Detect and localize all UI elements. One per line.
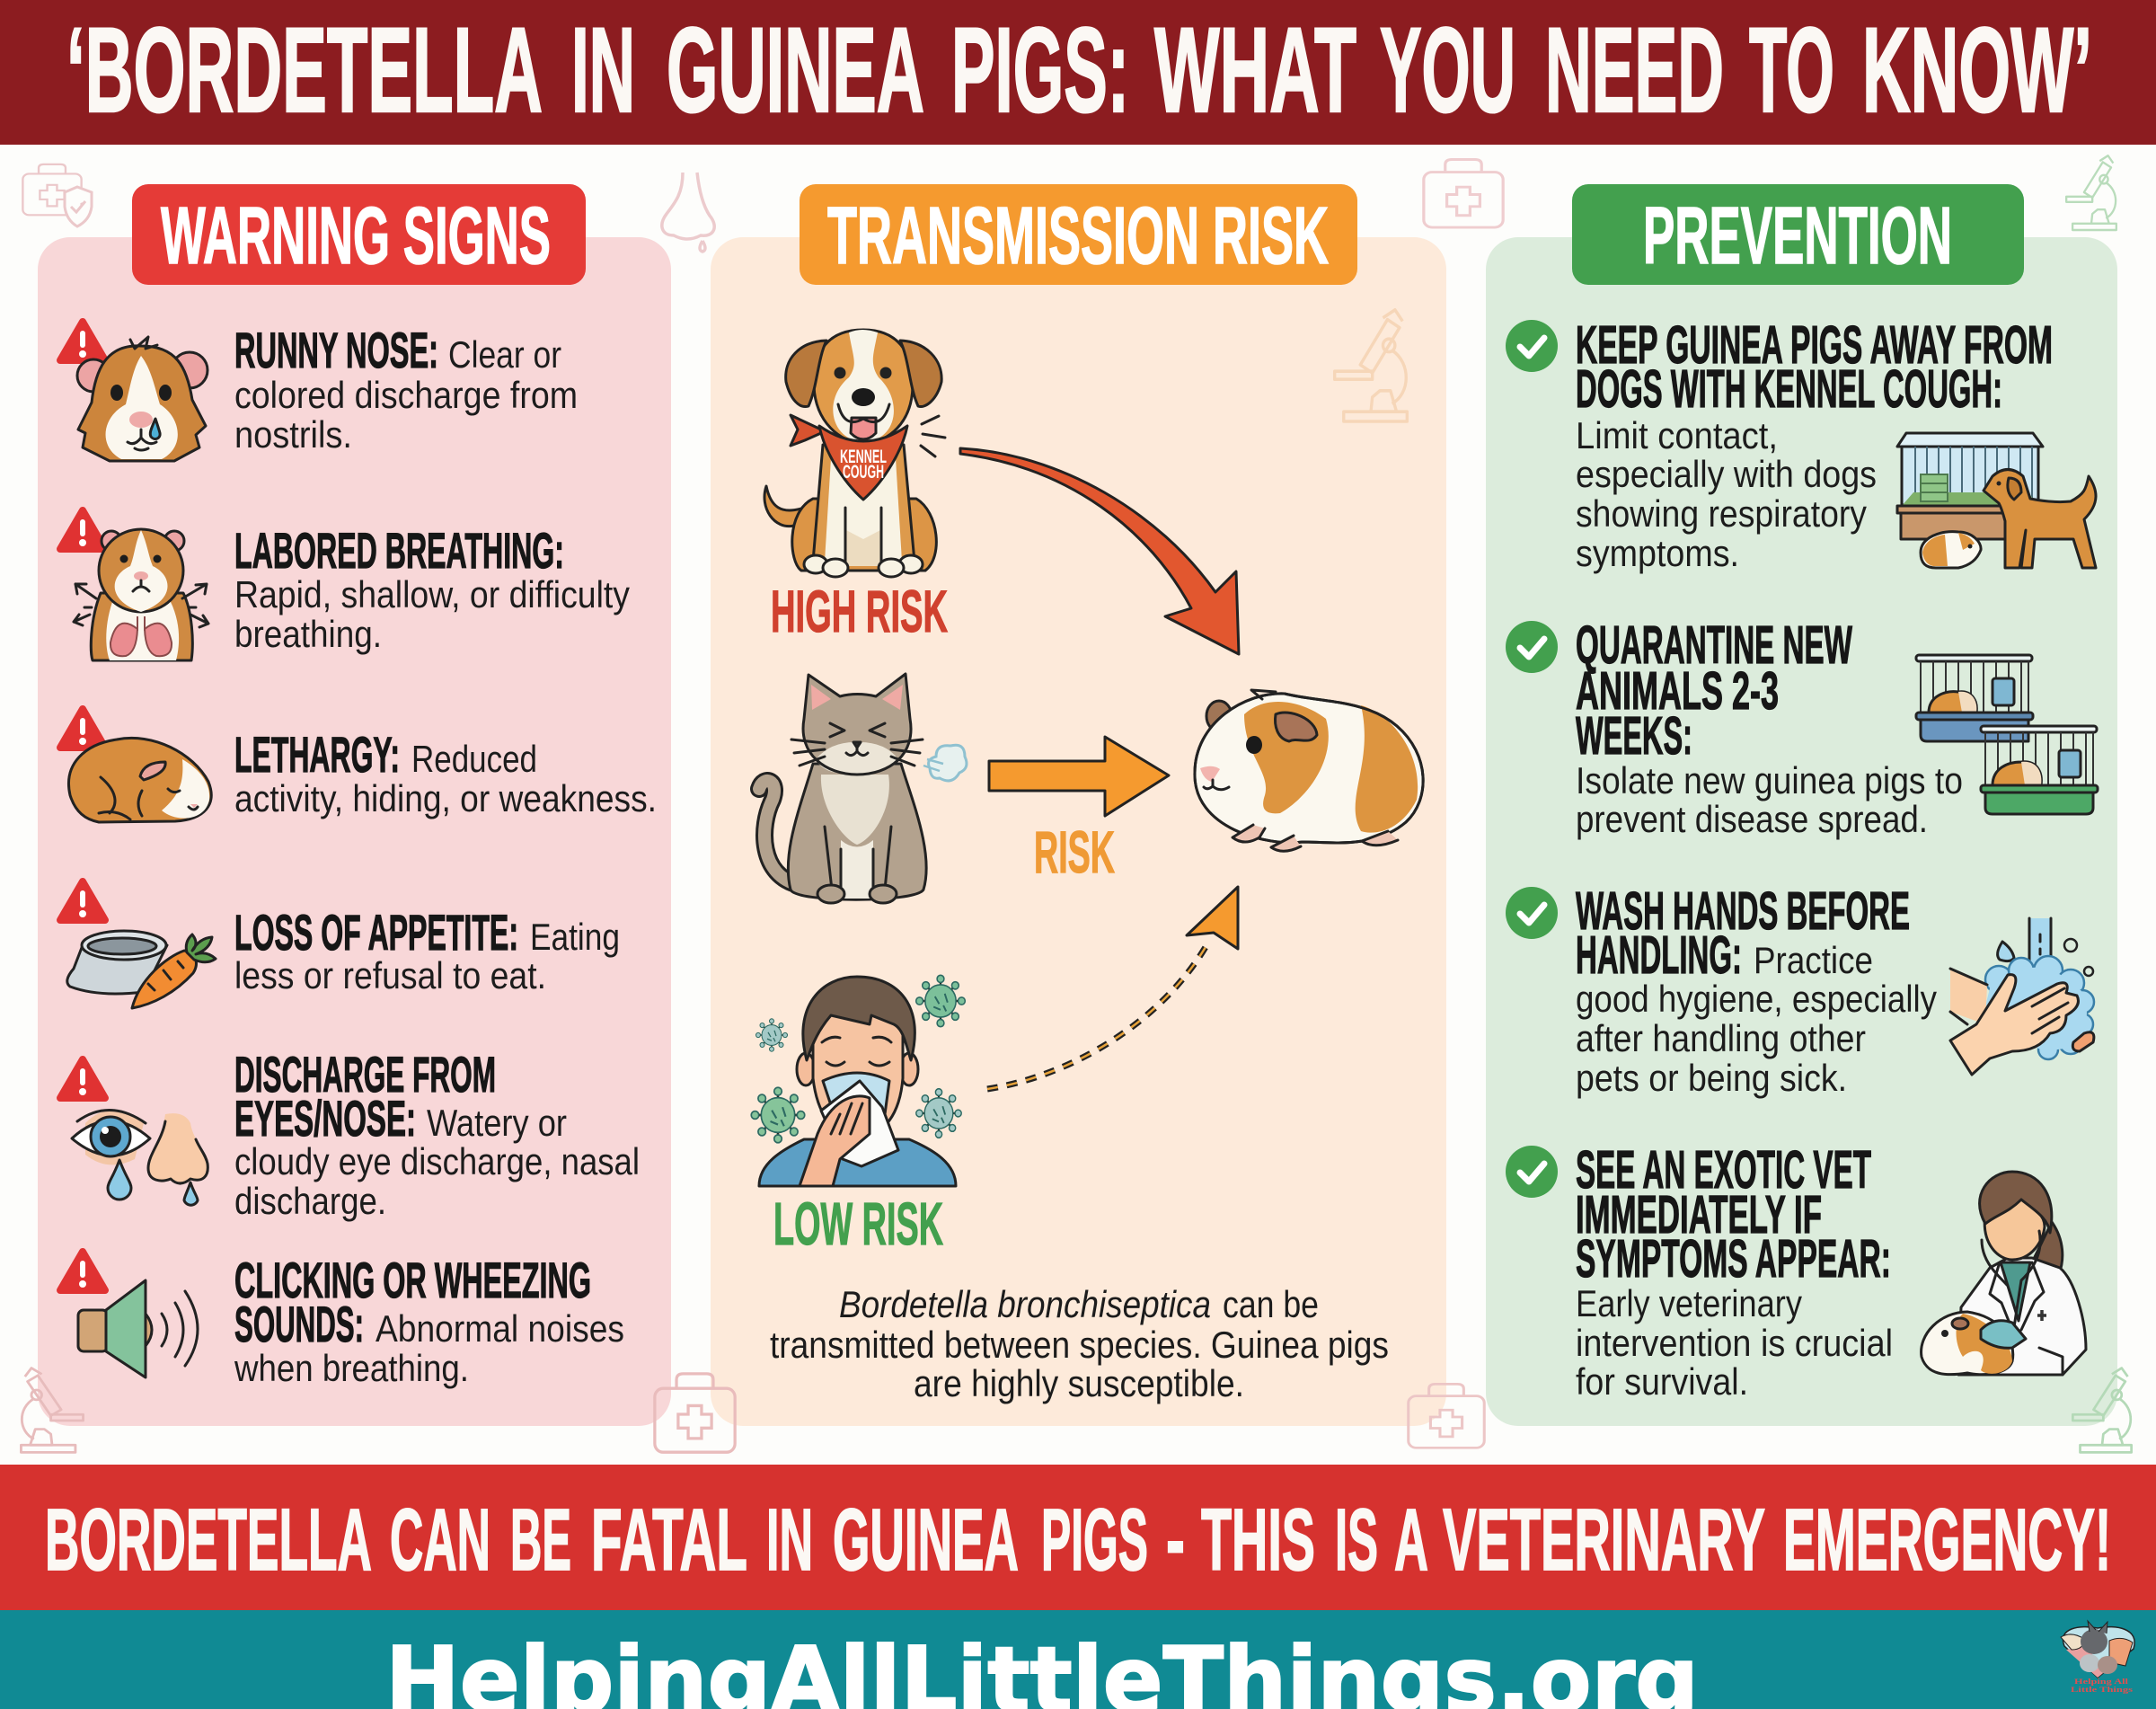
check icon 2 <box>1506 621 1558 673</box>
decorative icon: microscope on transmission panel <box>1335 310 1407 421</box>
label: discharge from eyes and nose: EYES/NOSE: <box>234 1090 416 1147</box>
text: quarantine new animals <box>1576 615 1963 840</box>
panel: prevention background <box>1486 237 2117 1426</box>
heading: transmission risk <box>800 184 1357 285</box>
title banner: IN <box>571 4 635 137</box>
decorative icon: first aid kit top <box>1424 159 1503 227</box>
label: lethargy <box>234 726 657 819</box>
label: loss of appetite <box>234 904 620 996</box>
icon: eye and nose with drops <box>72 1110 208 1205</box>
text: keep guinea pigs away: Limit contact, <box>1576 414 1778 456</box>
text: bordetella note: transmitted between species. Guinea pigs <box>770 1324 1389 1366</box>
title banner: YOU <box>1380 4 1515 137</box>
heading: warning signs: WARNING SIGNS <box>161 191 551 281</box>
text: see an exotic vet: SEE AN EXOTIC VET <box>1576 1140 1871 1200</box>
text: kennel cough bandana <box>840 447 887 483</box>
icon: guinea pig with lungs <box>74 529 208 660</box>
text: wash hands: Practice <box>1754 939 1873 981</box>
heading: warning signs <box>132 184 586 285</box>
emergency banner <box>0 1465 2156 1610</box>
panel: transmission risk background <box>711 237 1446 1426</box>
label: high risk: HIGH RISK <box>771 578 948 644</box>
label: clicking or wheezing sounds <box>234 1252 624 1389</box>
text: wash hands: after handling other <box>1576 1017 1866 1059</box>
label: runny nose: nostrils. <box>234 413 352 456</box>
heading: transmission risk: TRANSMISSION RISK <box>827 191 1329 281</box>
check icon 4 <box>1506 1146 1558 1198</box>
text: quarantine new animals: ANIMALS 2-3 <box>1576 661 1779 721</box>
illustration: washing hands <box>1950 918 2094 1075</box>
footer bar with website <box>0 1610 2156 1709</box>
text: wash hands <box>1576 881 1937 1099</box>
warning icon 4 <box>60 881 105 920</box>
text: kennel cough bandana: COUGH <box>843 462 884 483</box>
label: clicking or wheezing sounds: CLICKING OR WHEEZING <box>234 1252 591 1308</box>
label: loss of appetite: Eating <box>530 916 620 958</box>
label: labored breathing: LABORED BREATHING: <box>234 522 564 579</box>
text: keep guinea pigs away: showing respiratory <box>1576 492 1867 535</box>
text: keep guinea pigs away <box>1576 315 2053 574</box>
logo: helping all little things <box>2061 1621 2134 1694</box>
label: discharge from eyes and nose: Watery or <box>427 1102 567 1144</box>
warning icon 6 <box>60 1252 105 1290</box>
text: wash hands: HANDLING: <box>1576 925 1742 985</box>
panel: prevention <box>1506 184 2098 1403</box>
emergency banner: CAN <box>390 1491 490 1589</box>
icon: guinea pig face with runny nose <box>77 337 208 461</box>
label: clicking or wheezing sounds: Abnormal noises <box>376 1307 624 1350</box>
emergency banner: A <box>1394 1491 1428 1589</box>
text: see an exotic vet <box>1576 1140 1893 1403</box>
label: runny nose: colored discharge from <box>234 374 578 416</box>
title banner: WHAT <box>1154 4 1356 137</box>
illustration: dog with kennel cough <box>764 330 945 577</box>
decorative icon: microscope bottom right <box>2072 1368 2132 1452</box>
warning icon 5 <box>60 1059 105 1098</box>
label: lethargy: LETHARGY: <box>234 726 400 783</box>
label: discharge from eyes and nose: discharge. <box>234 1180 386 1222</box>
label: labored breathing: Rapid, shallow, or difficulty <box>234 573 630 615</box>
label: runny nose: RUNNY NOSE: <box>234 322 438 378</box>
text: keep guinea pigs away: especially with dogs <box>1576 453 1877 495</box>
text: see an exotic vet: Early veterinary <box>1576 1282 1802 1324</box>
text: quarantine new animals: prevent disease spread. <box>1576 798 1928 840</box>
arrow: risk <box>989 737 1169 816</box>
icon: speaker with sound waves <box>78 1280 198 1377</box>
decorative icon: nose <box>662 173 714 252</box>
label: lethargy: activity, hiding, or weakness. <box>234 777 657 819</box>
label: clicking or wheezing sounds: SOUNDS: <box>234 1296 364 1352</box>
label: runny nose: Clear or <box>448 333 561 376</box>
text: quarantine new animals: QUARANTINE NEW <box>1576 615 1852 675</box>
label: labored breathing: breathing. <box>234 613 382 655</box>
emergency banner: BE <box>510 1491 571 1589</box>
illustration: sick person with mask and tissue <box>751 975 965 1186</box>
illustration: cage, guinea pig and dog <box>1897 433 2096 568</box>
label: labored breathing <box>234 522 630 655</box>
label: risk: RISK <box>1034 819 1115 885</box>
illustration: vet holding guinea pig <box>1922 1172 2086 1375</box>
label: loss of appetite: LOSS OF APPETITE: <box>234 904 518 961</box>
warning icon 2 <box>60 510 105 549</box>
check icon 3 <box>1506 887 1558 939</box>
arrow: low risk dashed <box>987 887 1238 1089</box>
label: discharge from eyes and nose <box>234 1046 640 1222</box>
text: bordetella note: can be <box>1223 1283 1319 1325</box>
check icon 1 <box>1506 320 1558 372</box>
text: bordetella note <box>770 1283 1389 1404</box>
warning icon 1 <box>60 322 105 360</box>
text: keep guinea pigs away: symptoms. <box>1576 532 1739 574</box>
title banner: TO <box>1749 4 1834 137</box>
emergency banner: IN <box>766 1491 813 1589</box>
text: see an exotic vet: intervention is crucial <box>1576 1322 1893 1364</box>
decorative icon: first aid kit bottom right <box>1409 1384 1484 1448</box>
panel: transmission risk <box>751 184 1423 1404</box>
label: discharge from eyes and nose: DISCHARGE FROM <box>234 1046 496 1102</box>
text: wash hands: good hygiene, especially <box>1576 978 1937 1020</box>
title banner: GUINEA <box>667 4 924 137</box>
title banner: PIGS: <box>951 4 1129 137</box>
emergency banner: THIS <box>1201 1491 1315 1589</box>
logo: helping all little things: Helping All <box>2074 1678 2129 1686</box>
label: lethargy: Reduced <box>411 738 537 780</box>
decorative icon: microscope top right <box>2066 155 2116 230</box>
decorative medical icon: first aid kit and shield <box>22 164 92 226</box>
warning icon 3 <box>60 709 105 748</box>
emergency banner: FATAL <box>591 1491 747 1589</box>
title banner <box>0 0 2156 145</box>
illustration: sneezing cat <box>759 674 967 903</box>
logo: helping all little things: Little Things <box>2071 1686 2133 1694</box>
text: see an exotic vet: for survival. <box>1576 1360 1748 1403</box>
label: loss of appetite: less or refusal to eat. <box>234 954 546 996</box>
title banner: ‘BORDETELLA <box>66 4 543 137</box>
icon: food bowl and carrot <box>67 931 216 1008</box>
label: clicking or wheezing sounds: when breathing. <box>234 1347 469 1389</box>
text: quarantine new animals: WEEKS: <box>1576 706 1692 766</box>
emergency banner: - <box>1166 1491 1185 1589</box>
text: wash hands: pets or being sick. <box>1576 1057 1847 1099</box>
emergency banner: VETERINARY <box>1443 1491 1765 1589</box>
label: discharge from eyes and nose: cloudy eye discharge, nasal <box>234 1140 640 1182</box>
title banner: NEED <box>1545 4 1724 137</box>
panel: warning signs <box>60 184 657 1389</box>
arrow: high risk <box>960 448 1239 654</box>
text: kennel cough bandana: KENNEL <box>840 447 887 467</box>
decorative icon: microscope bottom left <box>21 1368 84 1452</box>
heading: prevention: PREVENTION <box>1643 191 1952 281</box>
emergency banner: PIGS <box>1041 1491 1148 1589</box>
text: quarantine new animals: Isolate new guinea pigs to <box>1576 759 1963 801</box>
emergency banner: GUINEA <box>833 1491 1019 1589</box>
text: bordetella note: Bordetella bronchiseptica <box>839 1283 1211 1325</box>
text: see an exotic vet: SYMPTOMS APPEAR: <box>1576 1229 1891 1288</box>
illustration: two quarantine cages <box>1916 655 2098 814</box>
emergency banner: BORDETELLA <box>45 1491 372 1589</box>
emergency banner: IS <box>1335 1491 1378 1589</box>
icon: sleeping guinea pig <box>69 738 211 822</box>
panel: warning signs background <box>38 237 671 1426</box>
heading: prevention <box>1572 184 2024 285</box>
text: see an exotic vet: IMMEDIATELY IF <box>1576 1185 1822 1244</box>
illustration: guinea pig <box>1195 690 1423 851</box>
text: wash hands: WASH HANDS BEFORE <box>1576 881 1910 941</box>
text: bordetella note: are highly susceptible. <box>914 1362 1244 1404</box>
decorative icon: first aid kit bottom left <box>655 1374 735 1452</box>
label: low risk: LOW RISK <box>773 1191 943 1258</box>
label: runny nose <box>234 322 578 456</box>
